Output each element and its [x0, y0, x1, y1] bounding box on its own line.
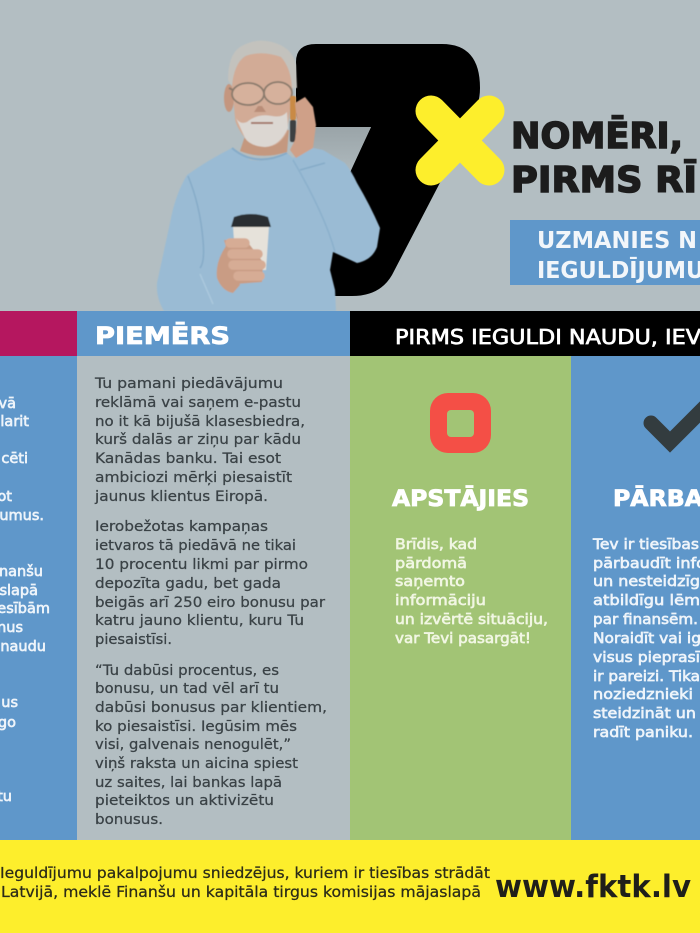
footer note: Ieguldījumu pakalpojumu sniedzējus, kuriem ir tiesības strādāt	[0, 864, 490, 882]
example text: Tu pamani piedāvājumu	[94, 376, 283, 392]
example text: no it kā bijušā klasesbiedra,	[95, 414, 305, 430]
stop text	[395, 537, 548, 647]
example text: viņš raksta un aicina spiest	[95, 756, 299, 772]
stop text: var Tevi pasargāt!	[395, 631, 531, 647]
example text: bonusu, un tad vēl arī tu	[95, 681, 279, 697]
example text: ietvaros tā piedāvā ne tikai	[95, 538, 296, 554]
heading: APSTĀJIES: APSTĀJIES	[392, 486, 529, 512]
example text: kurš dalās ar ziņu par kādu	[95, 432, 301, 448]
example text: ko piesaistīsi. Iegūsim mēs	[95, 719, 297, 735]
subtitle banner: UZMANIES N	[537, 228, 697, 254]
check text: un nesteidzīg	[593, 574, 700, 590]
check text: steidzināt un	[593, 706, 696, 722]
website address: www.fktk.lv	[495, 869, 691, 905]
stop text: pārdomā	[395, 556, 467, 572]
example text: bonusus.	[95, 812, 163, 828]
heading: PIEMĒRS: PIEMĒRS	[95, 321, 230, 350]
heading: PĀRBA: PĀRBA	[613, 486, 700, 512]
check text: par finansēm.	[593, 612, 698, 628]
coffee cup	[231, 214, 271, 270]
left column text fragments: slapā	[0, 583, 38, 599]
hand with phone	[290, 96, 316, 158]
left column text fragments: us	[1, 695, 18, 711]
example text: 10 procentu likmi par pirmo	[95, 557, 308, 573]
panel: left clipped column	[0, 311, 77, 840]
check text: ir pareizi. Tika	[593, 669, 700, 685]
hand holding cup	[217, 240, 263, 293]
check text	[592, 537, 700, 741]
subtitle banner	[510, 220, 700, 285]
title: PIRMS RĪ	[511, 159, 697, 201]
left column text fragments: umus.	[0, 508, 44, 524]
example text	[94, 376, 327, 828]
example text: “Tu dabūsi procentus, es	[95, 663, 279, 679]
example text: jaunus klientus Eiropā.	[94, 489, 268, 505]
panel: example column	[77, 311, 350, 840]
sweater	[157, 148, 380, 311]
example text: ambiciozi mērķi piesaistīt	[95, 470, 293, 486]
example text: pieteiktos un aktivizētu	[95, 793, 274, 809]
stop text: un izvērtē situāciju,	[395, 612, 548, 628]
left column text fragments: nanšu	[0, 564, 43, 580]
head	[224, 41, 297, 147]
neck	[240, 130, 289, 156]
person on phone holding a coffee cup	[157, 41, 380, 311]
panel: black header: PIRMS IEGULDI NAUDU, IEV	[395, 325, 700, 349]
stop text: informāciju	[395, 593, 486, 609]
example text: depozīta gadu, bet gada	[95, 576, 281, 592]
example text: beigās arī 250 eiro bonusu par	[95, 595, 325, 611]
left column text fragments	[0, 396, 50, 805]
check text: radīt paniku.	[593, 725, 693, 741]
icon: red stop sign	[430, 393, 491, 453]
footer note	[0, 864, 490, 901]
example text: Ierobežotas kampaņas	[95, 519, 268, 535]
example text: katru jauno klientu, kuru Tu	[95, 613, 304, 629]
check text: pārbaudīt info	[593, 556, 700, 572]
footer note: Latvijā, meklē Finanšu un kapitāla tirgus komisijas mājaslapā	[1, 883, 481, 901]
example text: visi, galvenais nenogulēt,”	[95, 737, 291, 753]
panel: stop column	[350, 356, 571, 840]
left column text fragments: larit	[0, 414, 29, 430]
check text: atbildīgu lēm	[593, 593, 700, 609]
check text: Noraidīt vai ig	[593, 631, 700, 647]
example text: Kanādas banku. Tai esot	[95, 451, 282, 467]
icon: check mark	[651, 396, 700, 442]
icon: yellow cross	[431, 111, 489, 170]
example text: reklāmā vai saņem e-pastu	[95, 395, 301, 411]
panel: check column	[571, 356, 700, 840]
check text: Tev ir tiesības	[592, 537, 699, 553]
footer band	[0, 840, 700, 933]
example text: uz saites, lai bankas lapā	[95, 775, 282, 791]
check text: noziedznieki	[593, 687, 693, 703]
title	[511, 115, 697, 201]
stop text: saņemto	[395, 574, 465, 590]
left column text fragments: cēti	[1, 451, 28, 467]
icon: large black number 7	[293, 44, 480, 296]
check text: visus pieprasī	[593, 650, 700, 666]
stop text: Brīdis, kad	[395, 537, 477, 553]
example text: piesaistīsi.	[95, 632, 172, 648]
title: NOMĒRI,	[511, 115, 683, 157]
panel: black header	[350, 311, 700, 356]
left column text fragments: naudu	[0, 639, 46, 655]
example text: dabūsi bonusus par klientiem,	[95, 700, 327, 716]
